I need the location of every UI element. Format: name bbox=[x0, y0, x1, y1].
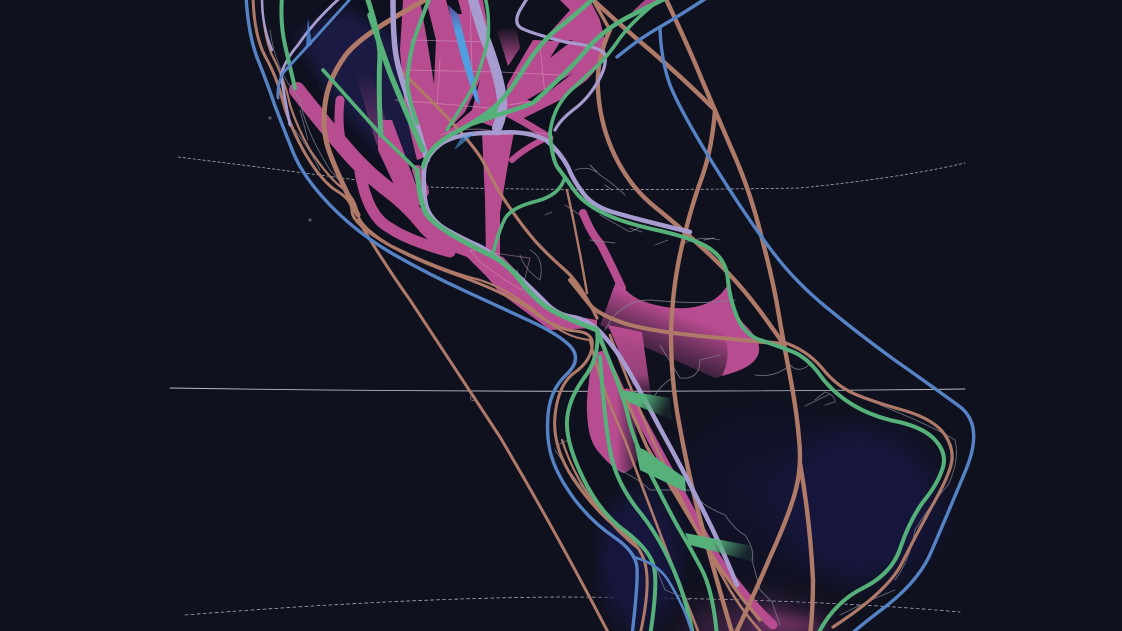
lavender: north trunks bbox=[393, 0, 427, 160]
pink flows bbox=[297, 0, 773, 625]
green: tapered offshoots bbox=[621, 390, 672, 420]
brown: thick northwest arc bbox=[324, 0, 425, 215]
green: Andes routes bbox=[567, 330, 717, 631]
pink: far upper right wedge bbox=[632, 0, 662, 12]
borders and coastlines bbox=[269, 0, 956, 625]
blue: north-east branch bbox=[617, 0, 708, 57]
lavender: northwest lines bbox=[281, 0, 341, 125]
green: north-west lines bbox=[281, 0, 597, 330]
pink: fading midwest wedge bbox=[497, 26, 520, 66]
pink: solid part of western wedge bbox=[378, 120, 422, 208]
pink: tapered western wedge bbox=[355, 72, 414, 205]
pink: north-east fan bbox=[505, 40, 607, 120]
pink: Central America corridor bbox=[430, 227, 597, 330]
brown: Atlantic arcs bbox=[590, 0, 813, 631]
green: hub to north-east bbox=[423, 0, 668, 167]
lavender: Gulf loop to Andes bbox=[424, 133, 737, 585]
pink: upper right wedge bbox=[545, 0, 606, 46]
brown routes bbox=[253, 0, 952, 631]
lavender: Gulf to Caribbean bbox=[497, 132, 690, 232]
dark gaps in the fan bbox=[420, 0, 573, 133]
pink: Venezuela fade bbox=[600, 280, 759, 378]
pink: Gulf central trunk bbox=[482, 132, 514, 258]
green routes bbox=[281, 0, 944, 631]
brown: east coast of South America bbox=[783, 342, 952, 627]
blue: west coast route bbox=[246, 0, 637, 631]
pink: North American fan bbox=[400, 0, 507, 160]
lavender routes bbox=[262, 0, 737, 585]
brown: west coast routes bbox=[253, 0, 647, 631]
brown: diagonal continental routes bbox=[400, 70, 785, 631]
brown: long Pacific route bbox=[358, 220, 610, 631]
blue: north-west branch bbox=[278, 0, 352, 98]
blue outer routes bbox=[246, 0, 974, 631]
green: Caribbean to Atlantic coast bbox=[550, 133, 944, 631]
graticule lines bbox=[170, 157, 965, 615]
pink: western corridors bbox=[297, 90, 773, 625]
blue: Atlantic route bbox=[660, 28, 974, 631]
blue: Southern cone branch bbox=[633, 557, 693, 631]
pink: Peru lobe bbox=[587, 350, 640, 473]
pink: Venezuela right lobe bbox=[700, 280, 759, 376]
green: Cuba link bbox=[493, 177, 565, 253]
accent blue flow bbox=[306, 5, 480, 150]
pink: Colombia stripe bbox=[608, 325, 651, 396]
land density glow bbox=[295, 8, 960, 631]
lavender: east coast bbox=[517, 0, 605, 130]
